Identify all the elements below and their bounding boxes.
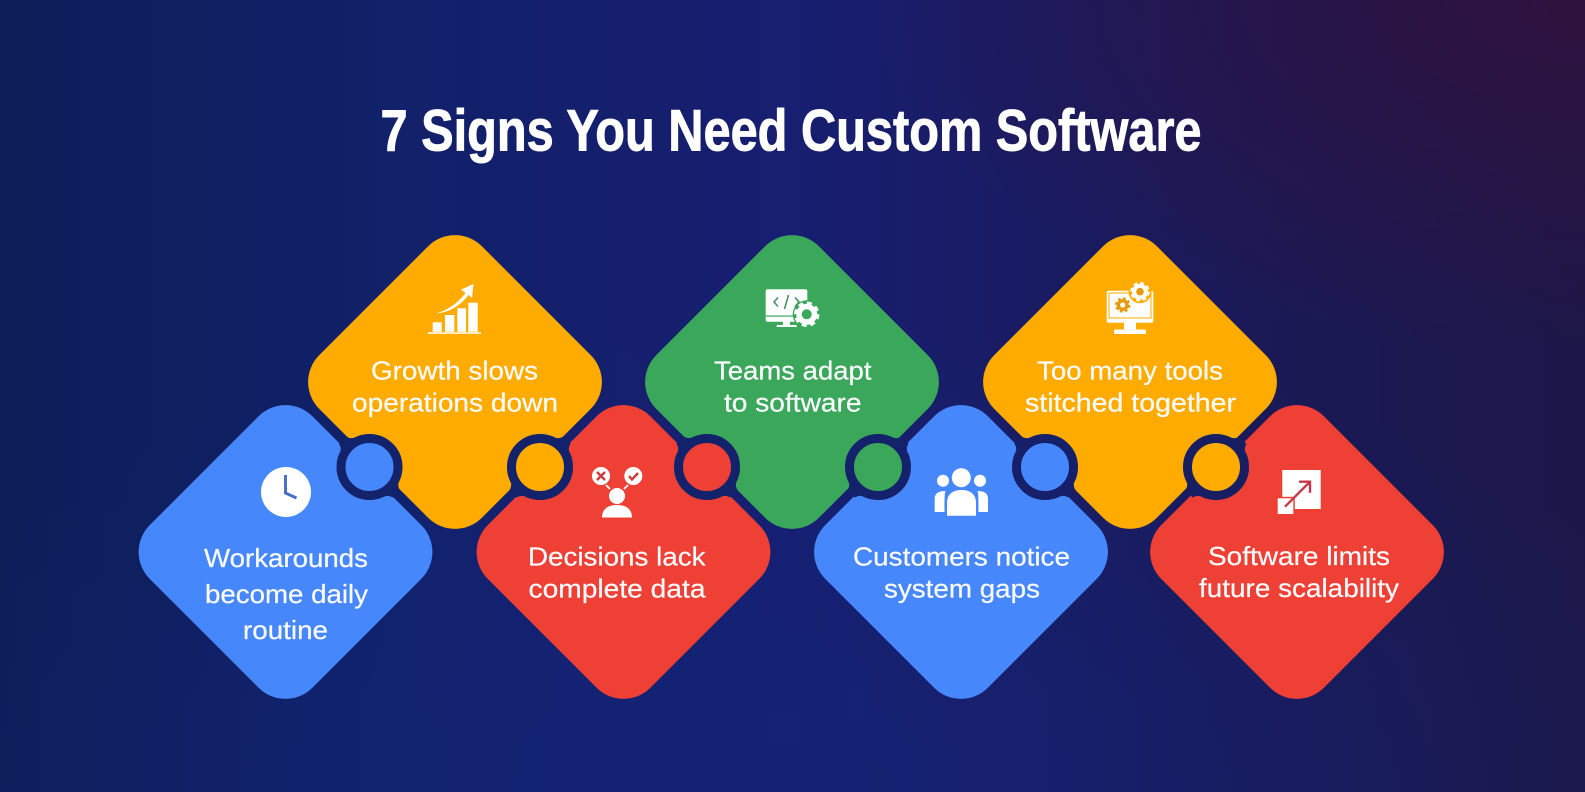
- text: teams: to software: [724, 388, 862, 418]
- text: growth: [352, 356, 558, 418]
- text: growth: operations down: [352, 388, 558, 418]
- panel: decisions: [461, 389, 786, 715]
- text: decisions: Decisions lack: [528, 542, 707, 572]
- icon: team: [935, 468, 988, 516]
- title: 7 Signs You Need Custom Software: [380, 98, 1202, 164]
- panel: scalability: [1134, 389, 1460, 715]
- text: workarounds: Workarounds: [204, 543, 368, 573]
- icon: clock: [261, 467, 311, 517]
- icon: growth chart: [428, 284, 481, 334]
- connector: green dot: [843, 432, 913, 502]
- text: teams: [714, 356, 872, 418]
- text: workarounds: [204, 543, 368, 645]
- text: teams: Teams adapt: [714, 356, 872, 386]
- connector: orange dot: [505, 432, 575, 502]
- text: tools: [1025, 356, 1236, 418]
- text: decisions: [528, 542, 707, 604]
- text: workarounds: routine: [243, 615, 328, 645]
- text: scalability: [1199, 541, 1399, 603]
- panel: customers: [798, 389, 1124, 715]
- connector: blue dot 2: [1010, 432, 1080, 502]
- connector: blue dot: [334, 432, 405, 502]
- text: customers: [853, 542, 1070, 604]
- text: tools: stitched together: [1025, 388, 1236, 418]
- connector: orange dot 2: [1181, 432, 1251, 502]
- text: tools: Too many tools: [1037, 356, 1223, 386]
- text: decisions: complete data: [528, 574, 706, 604]
- panel: growth: [292, 219, 618, 545]
- icon: decision person: [592, 467, 642, 518]
- text: growth: Growth slows: [371, 356, 538, 386]
- text: customers: system gaps: [884, 574, 1040, 604]
- text: scalability: future scalability: [1199, 573, 1399, 603]
- text: workarounds: become daily: [205, 579, 368, 609]
- text: customers: Customers notice: [853, 542, 1070, 572]
- icon: scale arrow: [1276, 470, 1321, 516]
- icon: monitor with gears: [1107, 280, 1153, 334]
- panel: tools: [967, 219, 1293, 545]
- text: scalability: Software limits: [1208, 541, 1390, 571]
- panel: teams: [629, 219, 955, 545]
- icon: code monitor with gear: [766, 289, 821, 328]
- panel: workarounds: [123, 389, 448, 715]
- connector: red dot: [672, 432, 742, 502]
